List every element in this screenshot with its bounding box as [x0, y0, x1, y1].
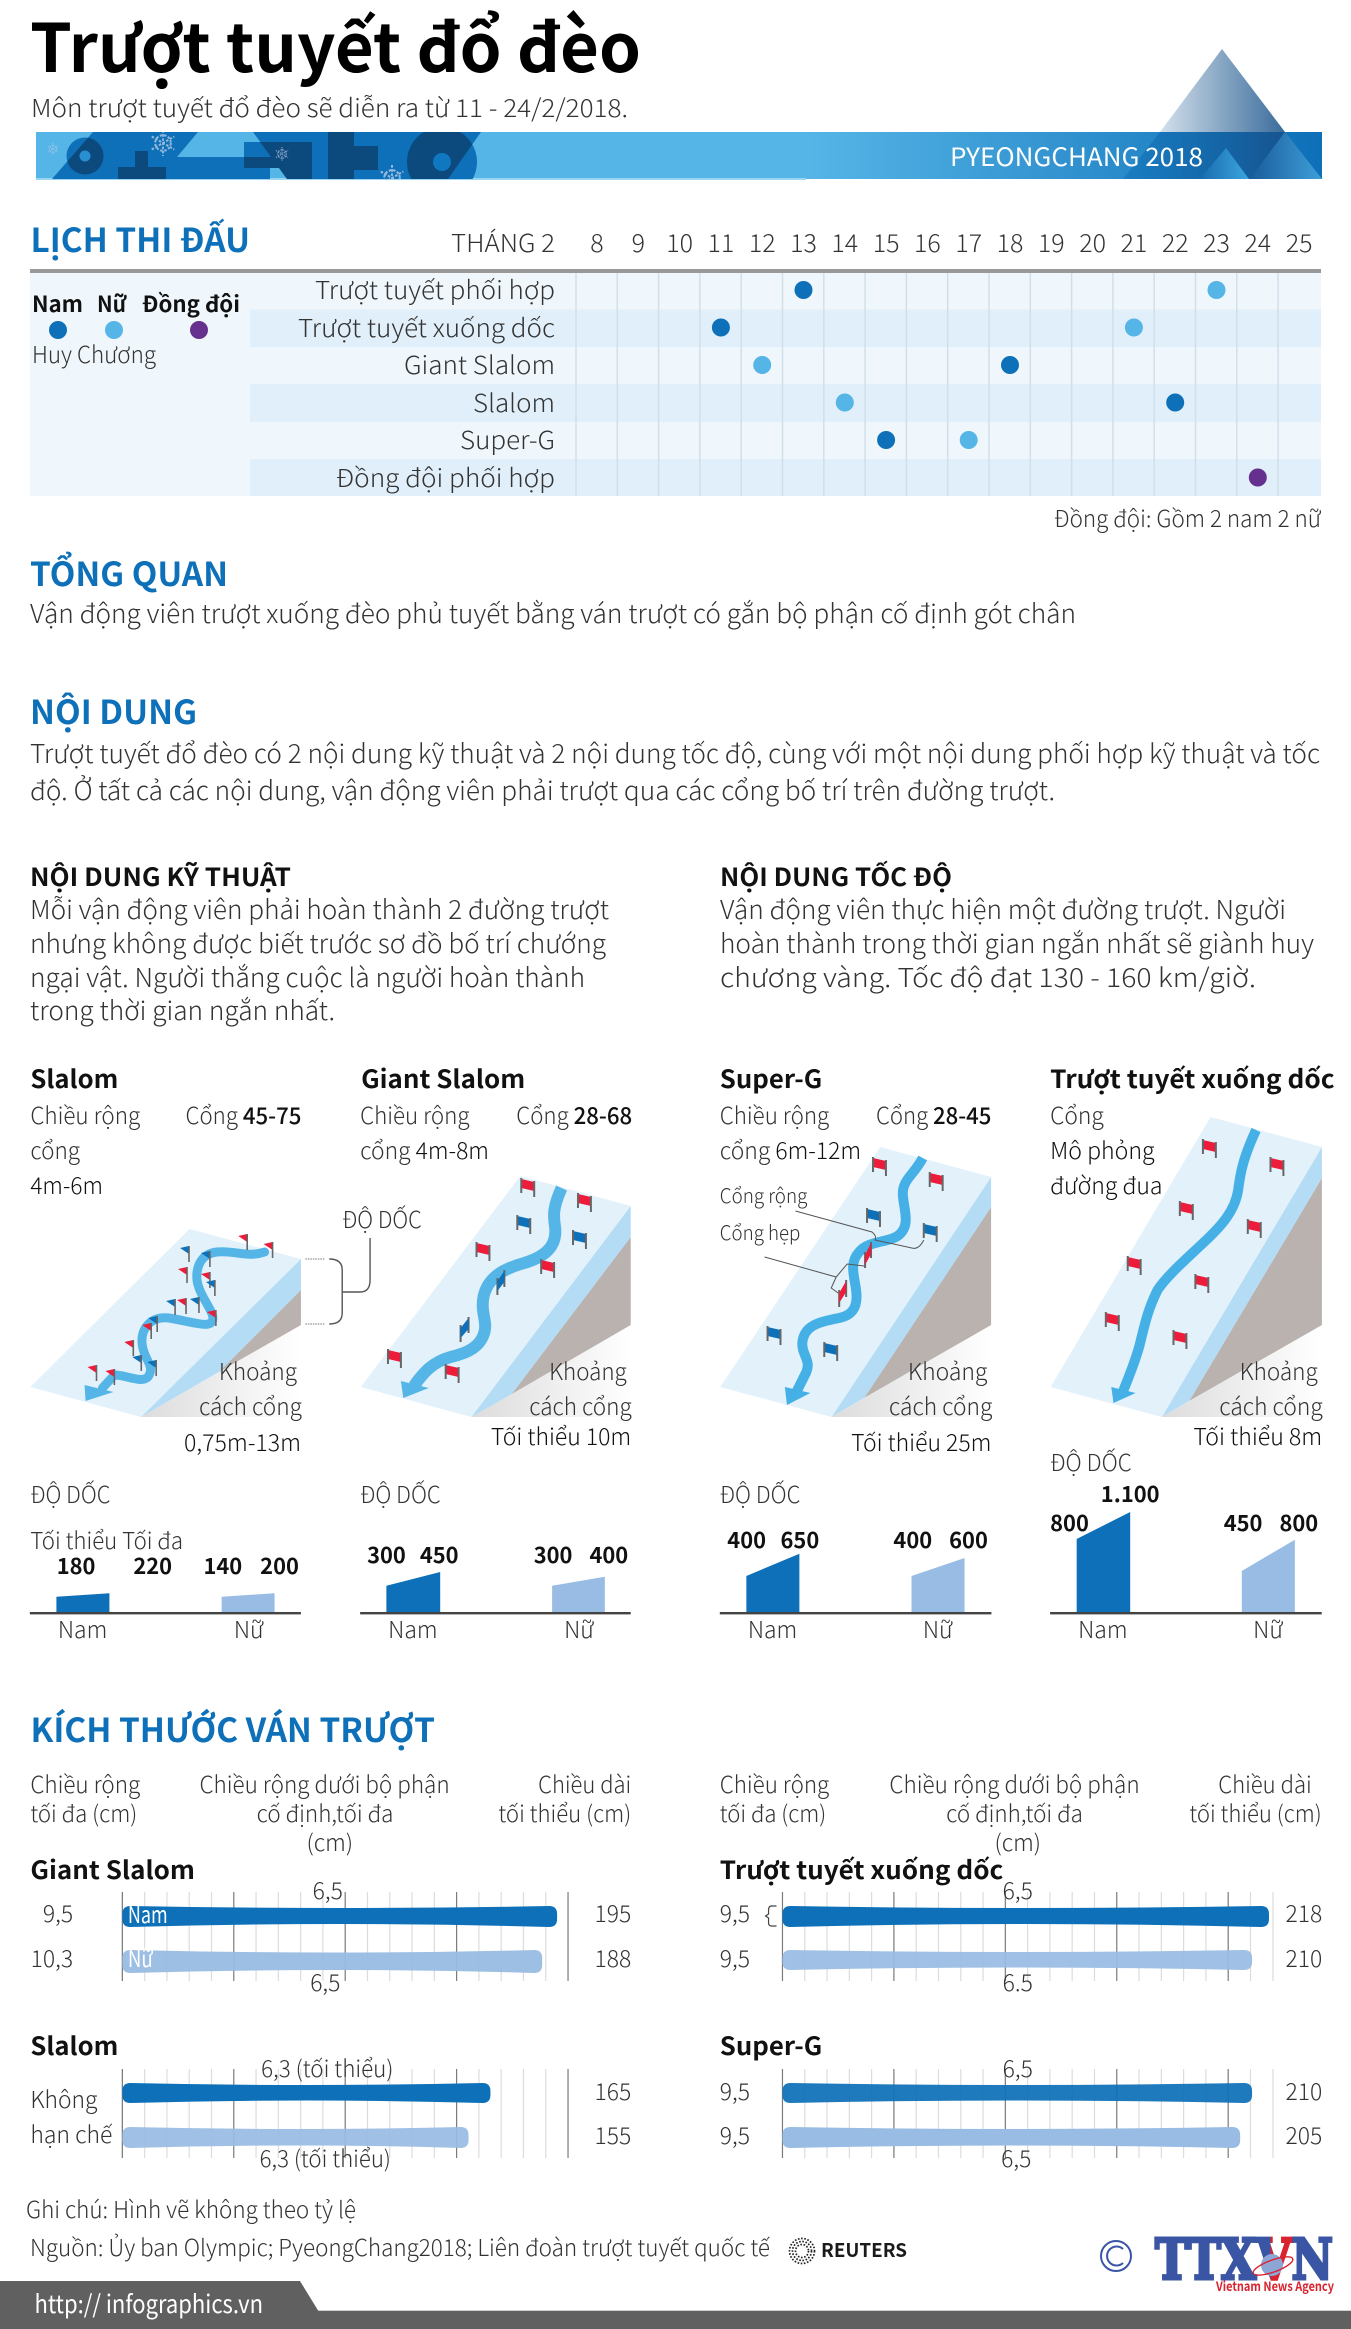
- ski panel: giant slalom: 6,5: [313, 1872, 343, 1906]
- ski panel: downhill: 9,5: [720, 1895, 750, 1929]
- ski: men: [122, 1906, 557, 1927]
- ski panel: super-g: [720, 2027, 1322, 2174]
- brace: [766, 1906, 777, 1926]
- day header: 10: [666, 224, 693, 260]
- section: overview: [30, 548, 1076, 631]
- day header: 16: [914, 224, 941, 260]
- chart: downhill gradient: [1050, 1444, 1322, 1645]
- ski: men: [782, 2083, 1252, 2103]
- column headers: left: (cm): [307, 1824, 353, 1858]
- gate spacing: slalom: cách cổng: [199, 1388, 302, 1422]
- legend: Huy Chương: [32, 336, 156, 370]
- legend: [32, 287, 240, 370]
- content text: Trượt tuyết đổ đèo có 2 nội dung kỹ thuật và 2 nội dung tốc độ, cùng với một nội dung phối hợp kỹ thuật và tốc: [30, 734, 1320, 771]
- technical events text: nhưng không được biết trước sơ đồ bố trí chướng: [30, 924, 606, 961]
- day header: 22: [1162, 224, 1189, 260]
- row labels: Trượt tuyết xuống dốc: [298, 309, 555, 345]
- speed events text: chương vàng. Tốc độ đạt 130 - 160 km/giờ.: [720, 958, 1256, 995]
- ski panel: downhill: 6.5: [1003, 1964, 1033, 1998]
- schedule table: [30, 269, 1321, 496]
- panel: slalom: [30, 1060, 302, 1458]
- gate type callouts: Cổng rộng: [720, 1180, 807, 1209]
- chart: slalom gradient: 180: [57, 1550, 95, 1581]
- chart: super-g gradient: 400: [893, 1524, 932, 1555]
- panel: downhill: [1050, 1060, 1335, 1452]
- day header: 13: [790, 224, 817, 260]
- column headers: left: tối đa (cm): [30, 1795, 137, 1829]
- legend: Nam: [32, 287, 83, 319]
- ski panel: giant slalom: Nam: [128, 1896, 168, 1930]
- column headers: left: Chiều dài: [538, 1766, 631, 1800]
- day header: 17: [955, 224, 982, 260]
- super-g specs: Super-G: [720, 1060, 822, 1096]
- day header: 21: [1121, 224, 1147, 260]
- chart: super-g gradient: Nữ: [923, 1611, 953, 1645]
- banner: PyeongChang 2018: [36, 49, 1322, 180]
- panel: super-g: [720, 1060, 993, 1458]
- gate spacing: slalom: Khoảng: [219, 1353, 297, 1387]
- ski: women: [122, 1950, 542, 1973]
- super-g specs: cổng 6m-12m: [720, 1132, 861, 1166]
- heading: content: NỘI DUNG: [30, 686, 197, 734]
- column headers: left: cố định,tối đa: [257, 1795, 393, 1829]
- chart: downhill gradient: Nam: [1078, 1611, 1128, 1645]
- panel: giant slalom: [360, 1060, 632, 1452]
- gate spacing: downhill: [1193, 1353, 1323, 1452]
- chart: slalom gradient: 140: [203, 1550, 242, 1581]
- slope diagram: downhill: [1051, 1117, 1322, 1417]
- day header: 12: [749, 224, 776, 260]
- chart: downhill gradient: ĐỘ DỐC: [1050, 1444, 1132, 1478]
- legend: Nữ: [97, 287, 127, 319]
- gate spacing: downhill: Khoảng: [1240, 1353, 1318, 1387]
- ski panel: super-g: 6,5: [1001, 2140, 1031, 2174]
- slope diagram: slalom: [30, 1229, 301, 1417]
- ski panel: downhill: 6,5: [1003, 1872, 1033, 1906]
- downhill specs: Cổng: [1050, 1097, 1104, 1131]
- technical events text: [30, 858, 609, 1028]
- gate spacing: giant slalom: Tối thiểu 10m: [491, 1418, 631, 1452]
- ski panel: downhill: Trượt tuyết xuống dốc: [720, 1851, 1003, 1887]
- chart: super-g gradient: 400: [727, 1524, 766, 1555]
- ski panel: slalom: 155: [594, 2117, 631, 2151]
- gate spacing: giant slalom: Khoảng: [549, 1353, 627, 1387]
- day header: 15: [873, 224, 899, 260]
- chart: super-g gradient: 600: [949, 1524, 988, 1555]
- ski panel: super-g: 205: [1285, 2117, 1322, 2151]
- downhill specs: Mô phỏng: [1050, 1132, 1155, 1166]
- ski panel: giant slalom: 6,5: [310, 1964, 340, 1998]
- super-g specs: Cổng 28-45: [876, 1097, 991, 1131]
- slalom specs: Slalom: [30, 1060, 118, 1096]
- column headers: left: Chiều rộng dưới bộ phận: [199, 1766, 450, 1800]
- chart: giant slalom gradient: 400: [589, 1539, 628, 1570]
- chart: giant slalom gradient: 450: [420, 1539, 459, 1570]
- row labels: Super-G: [460, 421, 555, 457]
- gate spacing: super-g: Tối thiểu 25m: [851, 1424, 991, 1458]
- overview text: Vận động viên trượt xuống đèo phủ tuyết bằng ván trượt có gắn bộ phận cố định gót chân: [30, 594, 1076, 631]
- day header: [590, 224, 1312, 260]
- gate spacing: slalom: [184, 1353, 302, 1458]
- slope diagram: super-g: [720, 1147, 991, 1417]
- subtitle: Môn trượt tuyết đổ đèo sẽ diễn ra từ 11 - 24/2/2018.: [31, 89, 628, 125]
- day header: 9: [632, 224, 645, 260]
- day header: 25: [1286, 224, 1312, 260]
- chart: giant slalom gradient: 300: [367, 1539, 406, 1570]
- ski panel: downhill: 210: [1285, 1940, 1322, 1974]
- chart: downhill gradient: Nữ: [1253, 1611, 1283, 1645]
- column headers: left: tối thiểu (cm): [498, 1795, 631, 1829]
- ski panel: slalom: 6,3 (tối thiểu): [261, 2050, 393, 2084]
- gate spacing: giant slalom: cách cổng: [529, 1388, 632, 1422]
- column headers: right: Chiều rộng dưới bộ phận: [889, 1766, 1140, 1800]
- giant slalom specs: Chiều rộng: [360, 1097, 470, 1131]
- ski panel: downhill: [720, 1851, 1322, 1998]
- column headers: right: [720, 1766, 1322, 1858]
- day header: 24: [1244, 224, 1271, 260]
- note: Ghi chú: Hình vẽ không theo tỷ lệ: [26, 2191, 356, 2225]
- row labels: Slalom: [473, 384, 555, 420]
- ski panel: giant slalom: 10,3: [31, 1940, 73, 1974]
- ski panel: slalom: Không: [30, 2081, 98, 2115]
- content text: [30, 734, 1320, 808]
- chart: downhill gradient: 1.100: [1101, 1478, 1160, 1509]
- callout: slope bracket: [305, 1201, 422, 1324]
- legend: Đồng đội: [142, 287, 240, 319]
- row labels: Trượt tuyết phối hợp: [315, 271, 555, 307]
- chart: slalom gradient: ĐỘ DỐC: [30, 1476, 110, 1510]
- ski panel: slalom: Slalom: [30, 2027, 118, 2063]
- giant slalom specs: [360, 1060, 632, 1166]
- chart: giant slalom gradient: Nữ: [564, 1611, 594, 1645]
- giant slalom specs: cổng 4m-8m: [360, 1132, 489, 1166]
- gate spacing: super-g: Khoảng: [908, 1353, 988, 1387]
- slalom specs: [30, 1060, 301, 1201]
- day header: 14: [831, 224, 858, 260]
- ski: men: [782, 1906, 1269, 1927]
- ski panel: super-g: 6,5: [1003, 2050, 1033, 2084]
- chart: super-g gradient: 650: [781, 1524, 819, 1555]
- ski panel: slalom: 165: [594, 2073, 631, 2107]
- gate spacing: slalom: 0,75m-13m: [184, 1424, 301, 1458]
- day header: 23: [1203, 224, 1230, 260]
- chart: downhill gradient: 800: [1050, 1507, 1089, 1538]
- slope diagram: giant slalom: [361, 1176, 631, 1417]
- row labels: Giant Slalom: [404, 346, 555, 382]
- row labels: [298, 271, 555, 495]
- ski panel: giant slalom: 195: [594, 1895, 631, 1929]
- ski panel: downhill: 218: [1285, 1895, 1322, 1929]
- chart: super-g gradient: Nam: [748, 1611, 797, 1645]
- chart: giant slalom gradient: ĐỘ DỐC: [360, 1476, 441, 1510]
- day header: 20: [1079, 224, 1106, 260]
- ski panel: downhill: 9,5: [720, 1940, 750, 1974]
- chart: super-g gradient: [720, 1476, 991, 1645]
- chart: downhill gradient: 800: [1279, 1507, 1318, 1538]
- gate spacing: downhill: cách cổng: [1219, 1388, 1323, 1422]
- speed events text: [720, 858, 1314, 995]
- slalom specs: Cổng 45-75: [186, 1097, 301, 1131]
- chart: slalom gradient: Nam: [58, 1611, 107, 1645]
- ski panel: giant slalom: Giant Slalom: [30, 1851, 195, 1887]
- ski panel: super-g: 9,5: [720, 2073, 750, 2107]
- giant slalom specs: Cổng 28-68: [516, 1097, 632, 1131]
- downhill specs: Trượt tuyết xuống dốc: [1050, 1060, 1335, 1096]
- logo: reuters: REUTERS: [821, 2236, 907, 2263]
- footer url: http:// infographics.vn: [34, 2285, 263, 2321]
- month label: THÁNG 2: [451, 224, 555, 260]
- column headers: left: [30, 1766, 631, 1858]
- technical events text: NỘI DUNG KỸ THUẬT: [30, 858, 291, 894]
- technical events text: trong thời gian ngắn nhất.: [30, 991, 335, 1028]
- downhill specs: đường đua: [1050, 1167, 1163, 1201]
- section: schedule: [30, 214, 1321, 534]
- chart: giant slalom gradient: 300: [534, 1539, 572, 1570]
- content text: độ. Ở tất cả các nội dung, vận động viên phải trượt qua các cổng bố trí trên đường trượt.: [30, 771, 1055, 808]
- ski: women: [122, 2127, 469, 2148]
- chart: slalom gradient: 220: [133, 1550, 172, 1581]
- ski panel: slalom: [30, 2027, 631, 2174]
- ski panel: super-g: Super-G: [720, 2027, 822, 2063]
- banner label: PYEONGCHANG 2018: [950, 138, 1203, 174]
- section: content: [30, 686, 1320, 808]
- ski panel: super-g: 210: [1285, 2073, 1322, 2107]
- column headers: right: tối thiểu (cm): [1189, 1795, 1322, 1829]
- day header: 19: [1038, 224, 1065, 260]
- medal dots: [712, 281, 1267, 486]
- downhill specs: [1050, 1060, 1335, 1201]
- ski panel: giant slalom: Nữ: [128, 1940, 154, 1974]
- slalom specs: 4m-6m: [30, 1167, 103, 1201]
- gate type callouts: [720, 1180, 924, 1293]
- mountain peak: [1160, 49, 1285, 132]
- technical events text: ngại vật. Người thắng cuộc là người hoàn thành: [30, 958, 585, 995]
- speed events text: Vận động viên thực hiện một đường trượt. Người: [720, 890, 1286, 927]
- giant slalom specs: Giant Slalom: [361, 1060, 525, 1096]
- column headers: right: Chiều dài: [1218, 1766, 1312, 1800]
- chart: super-g gradient: ĐỘ DỐC: [720, 1476, 800, 1510]
- heading: overview: TỔNG QUAN: [30, 548, 228, 596]
- gate spacing: giant slalom: [491, 1353, 632, 1452]
- gate type callouts: Cổng hẹp: [720, 1217, 800, 1246]
- speed events text: hoàn thành trong thời gian ngắn nhất sẽ giành huy: [720, 924, 1314, 961]
- day header: 8: [590, 224, 604, 260]
- callout: slope bracket: ĐỘ DỐC: [342, 1201, 422, 1235]
- heading: ski dimensions: KÍCH THƯỚC VÁN TRƯỢT: [30, 1704, 435, 1752]
- column headers: right: Chiều rộng: [720, 1766, 830, 1800]
- ski: men: [122, 2083, 490, 2103]
- source: Nguồn: Ủy ban Olympic; PyeongChang2018; Liên đoàn trượt tuyết quốc tế: [30, 2229, 771, 2263]
- column headers: right: tối đa (cm): [720, 1795, 826, 1829]
- gate spacing: super-g: [851, 1353, 993, 1458]
- ski panel: slalom: 6,3 (tối thiểu): [260, 2140, 391, 2174]
- slalom specs: Chiều rộng: [30, 1097, 141, 1131]
- footer bar: [0, 2281, 1351, 2329]
- column headers: right: (cm): [995, 1824, 1041, 1858]
- column headers: left: Chiều rộng: [30, 1766, 141, 1800]
- chart: slalom gradient: 200: [260, 1550, 299, 1581]
- technical events text: Mỗi vận động viên phải hoàn thành 2 đường trượt: [30, 890, 609, 927]
- team note: Đồng đội: Gồm 2 nam 2 nữ: [1054, 500, 1321, 534]
- ski panel: giant slalom: 188: [594, 1940, 631, 1974]
- day header: 11: [708, 224, 734, 260]
- ski panel: giant slalom: 9,5: [43, 1895, 73, 1929]
- speed events text: NỘI DUNG TỐC ĐỘ: [720, 858, 952, 894]
- super-g specs: Chiều rộng: [720, 1097, 830, 1131]
- heading: schedule: LỊCH THI ĐẤU: [30, 214, 250, 262]
- banner decorative pattern: [48, 132, 481, 179]
- day header: 18: [997, 224, 1023, 260]
- ski: women: [782, 2127, 1240, 2148]
- column headers: right: cố định,tối đa: [946, 1795, 1083, 1829]
- chart: slalom gradient: Tối thiểu Tối đa: [30, 1522, 183, 1556]
- chart: slalom gradient: [30, 1476, 301, 1645]
- chart: giant slalom gradient: [360, 1476, 631, 1645]
- gate spacing: super-g: cách cổng: [889, 1388, 993, 1422]
- icon: copyright: [1101, 2241, 1131, 2271]
- gate spacing: downhill: Tối thiểu 8m: [1193, 1418, 1322, 1452]
- row labels: Đồng đội phối hợp: [336, 459, 555, 495]
- chart: giant slalom gradient: Nam: [388, 1611, 438, 1645]
- logo: TTXVN: TTXVN: [1155, 2227, 1333, 2293]
- super-g specs: [720, 1060, 991, 1166]
- ski panel: super-g: 9,5: [720, 2117, 750, 2151]
- chart: downhill gradient: 450: [1224, 1507, 1262, 1538]
- ski panel: giant slalom: [30, 1851, 631, 1998]
- slalom specs: cổng: [30, 1132, 81, 1166]
- ski panel: slalom: hạn chế: [30, 2116, 113, 2150]
- chart: slalom gradient: Nữ: [234, 1611, 264, 1645]
- ski: women: [782, 1950, 1252, 1970]
